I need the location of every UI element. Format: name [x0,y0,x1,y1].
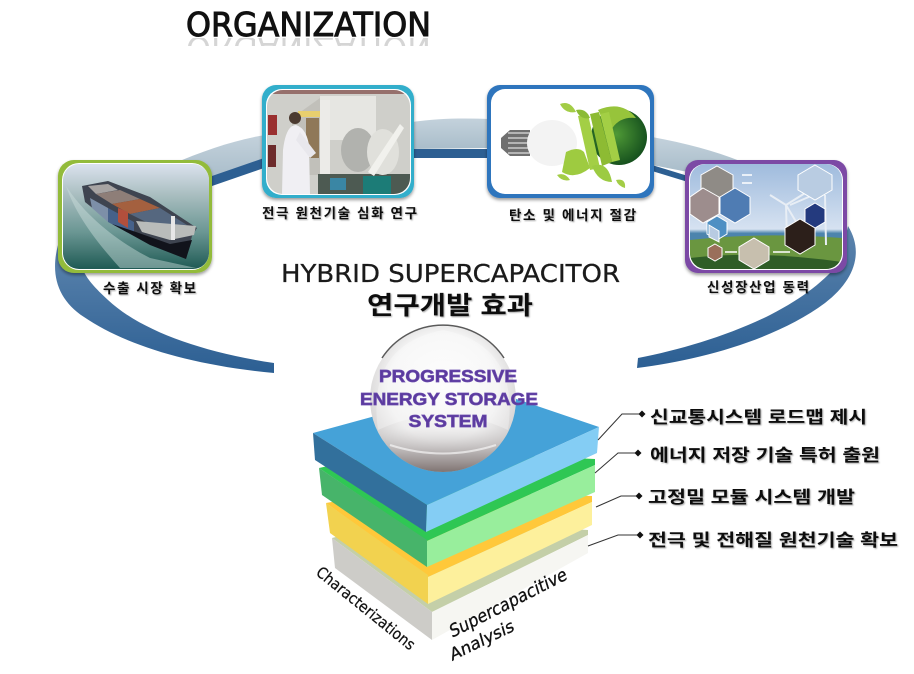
layer: blue top [313,387,599,532]
card: energy saving bulb image [487,85,654,198]
leader lines [588,414,640,546]
heading: hybrid supercapacitor: 연구개발 효과 [367,292,533,320]
caption: export market: 수출 시장 확보 [103,280,196,296]
label: characterizations: Characterizations [312,563,419,654]
card: electrode research lab photo [262,85,414,198]
sphere text: progressive energy storage system: PROGRESSIVE [379,366,517,386]
label: electrode and electrolyte technology: 전극 및 전해질 원천기술 확보 [648,531,898,550]
sphere text: progressive energy storage system [360,366,538,431]
sphere text: progressive energy storage system: SYSTEM [408,411,488,431]
layer: yellow [326,490,592,604]
title: ORGANIZATION [186,5,431,44]
leader diamonds [634,410,646,538]
heading: hybrid supercapacitor: HYBRID SUPERCAPACITOR [281,259,620,288]
layer: green [319,450,595,567]
label: energy storage patent: 에너지 저장 기술 특허 출원 [650,446,880,465]
title: ORGANIZATION [186,29,431,68]
glass sphere [370,325,516,472]
curved ring: lower right band [637,226,856,368]
card: export ship photo [58,160,212,273]
curved ring: upper back band [170,118,740,186]
sphere text: progressive energy storage system: ENERGY STORAGE [360,389,538,409]
label: precision module system: 고정밀 모듈 시스템 개발 [648,488,855,507]
layer stack [313,387,599,640]
label: supercapacitive analysis: Supercapacitive [448,565,569,643]
heading: hybrid supercapacitor [281,259,620,320]
caption: carbon and energy saving: 탄소 및 에너지 절감 [509,208,637,223]
caption: electrode research: 전극 원천기술 심화 연구 [262,206,417,221]
caption: new growth industry: 신성장산업 동력 [707,280,809,295]
curved ring: lower left band [55,245,274,373]
label: new transport roadmap: 신교통시스템 로드맵 제시 [650,408,867,427]
card: new growth industry image [685,160,847,273]
label: supercapacitive analysis: Analysis [448,616,516,665]
layer: grey base [332,520,588,640]
